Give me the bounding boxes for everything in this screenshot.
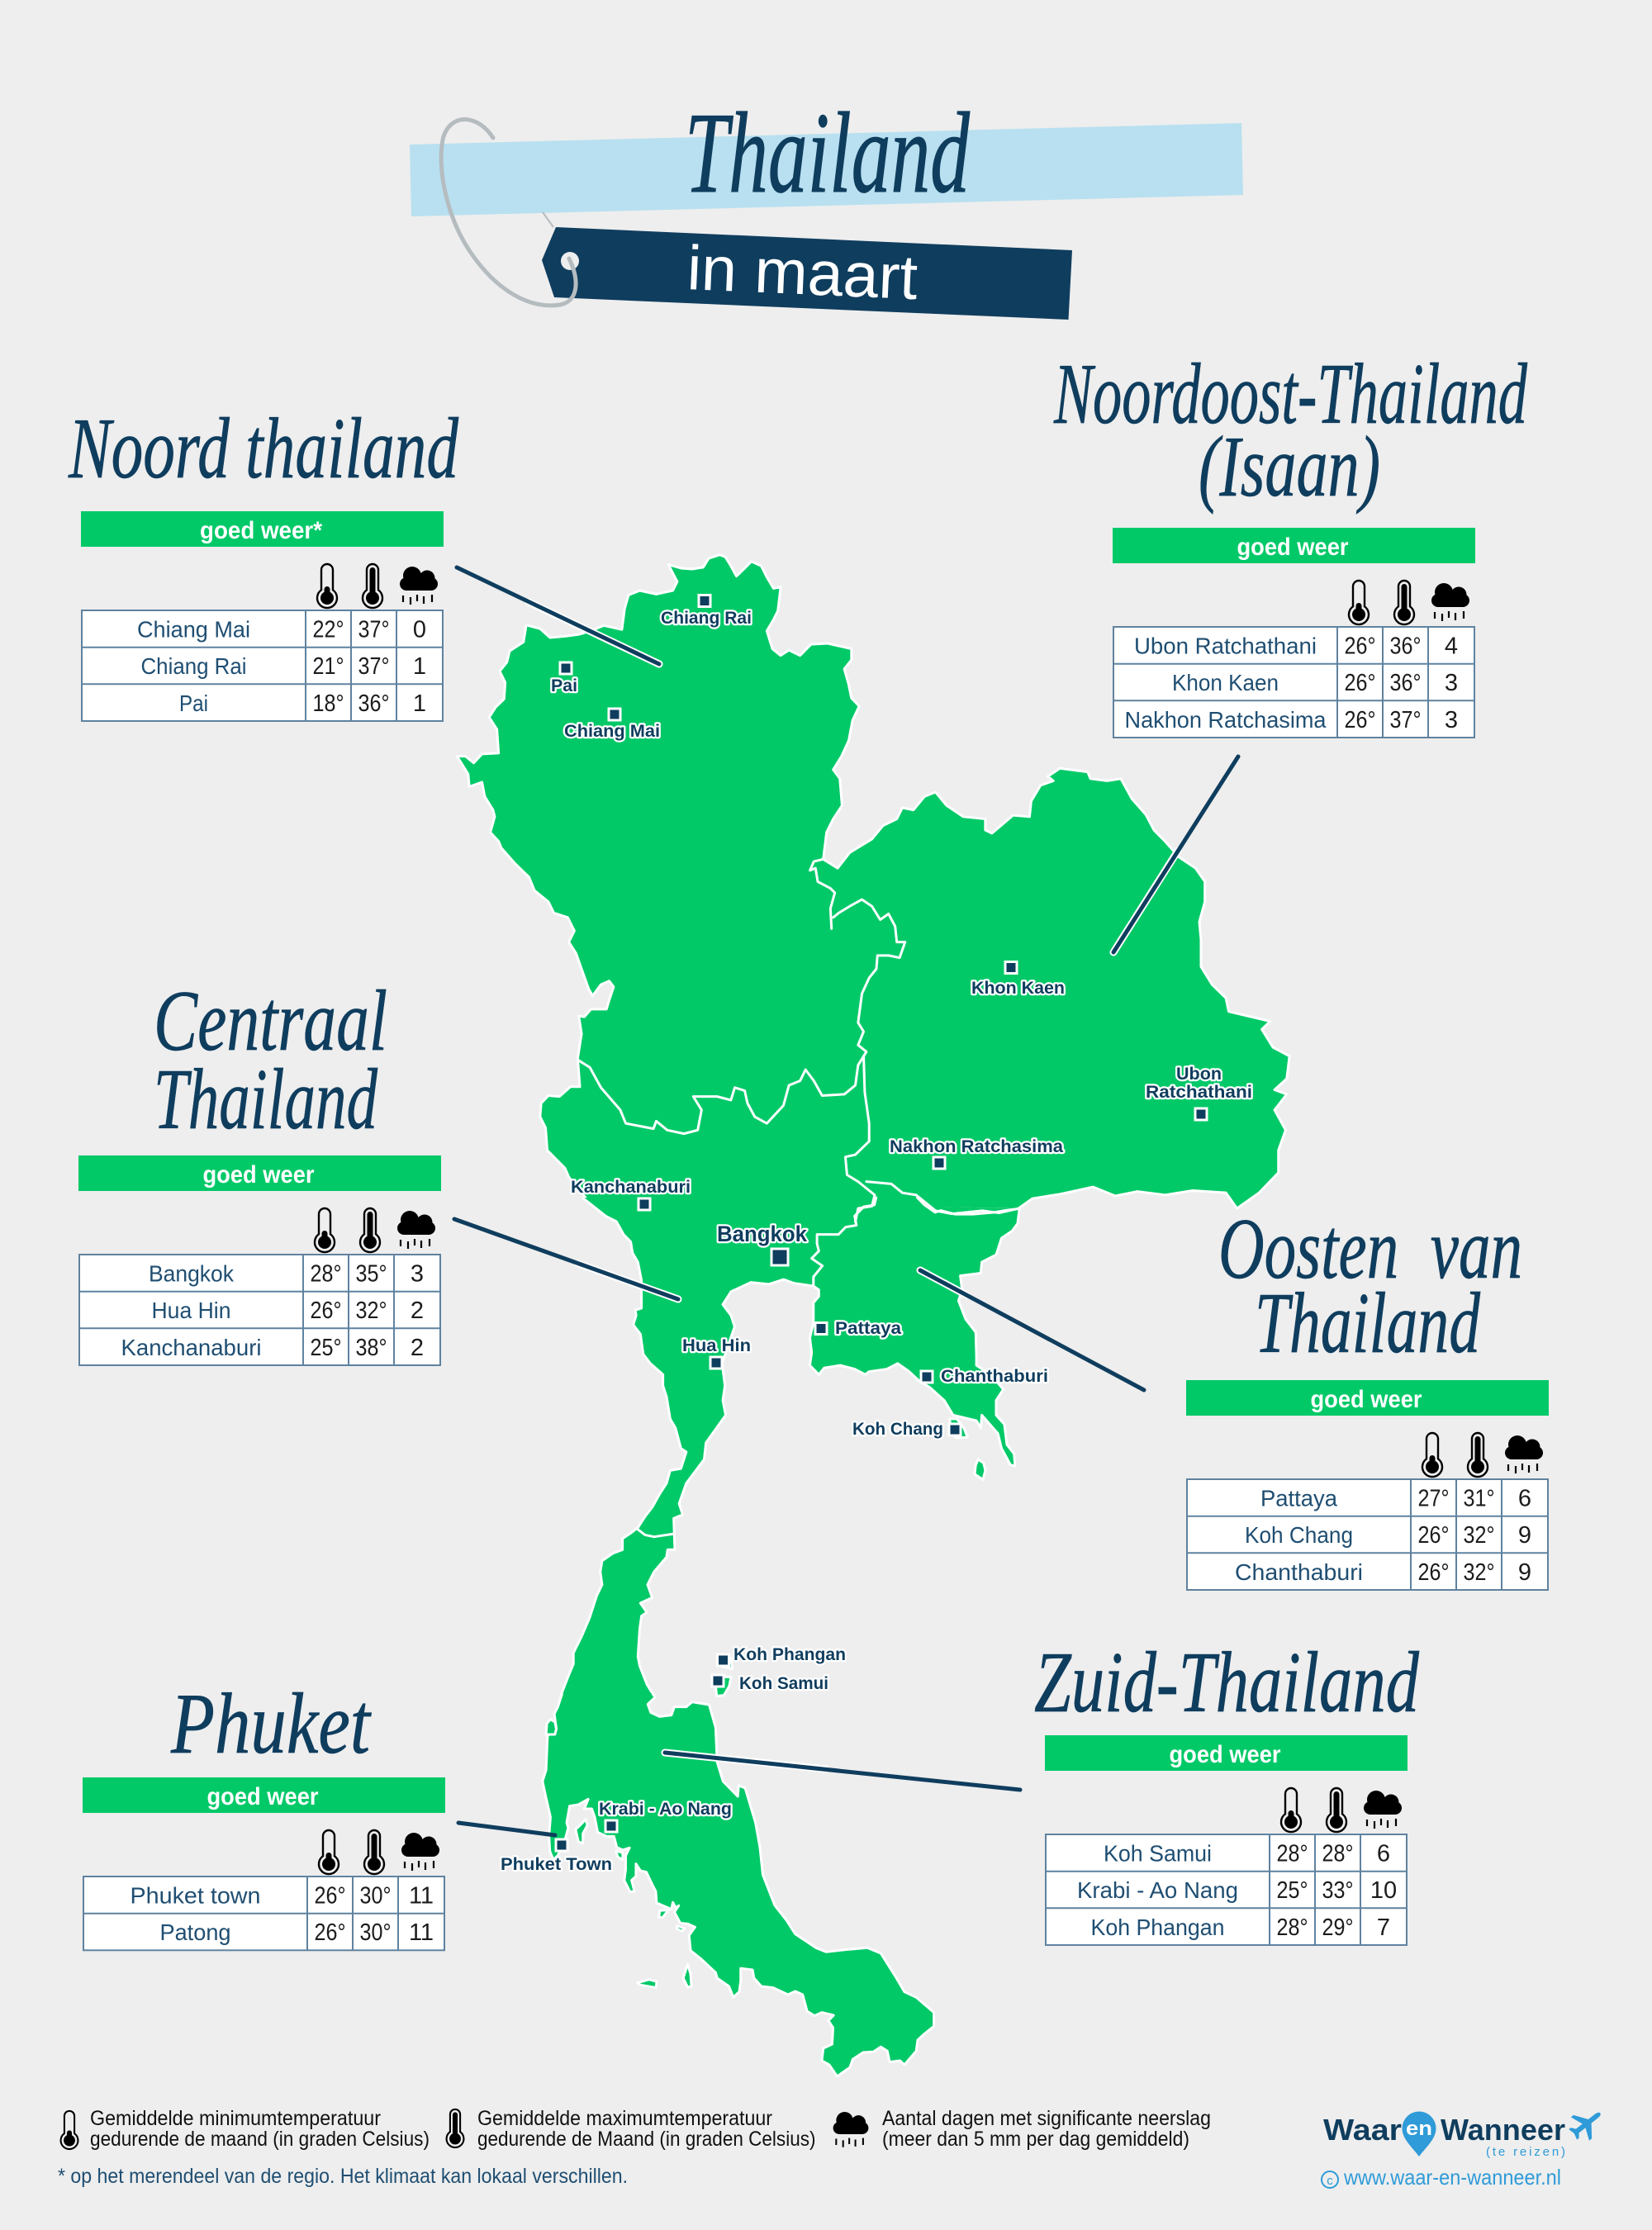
weather bar — [1045, 1735, 1408, 1771]
tag hole — [561, 252, 579, 270]
heading — [154, 972, 387, 1147]
table: 28° — [311, 1260, 342, 1287]
logo — [1322, 2101, 1609, 2190]
icon: rain cloud — [401, 1833, 439, 1871]
table: 2 — [411, 1335, 424, 1361]
table: 29° — [1322, 1914, 1353, 1941]
table: Koh Phangan — [1090, 1914, 1224, 1940]
icon: max temperature — [1394, 581, 1414, 624]
icon: max temperature — [364, 1830, 384, 1874]
pointer: phuket — [458, 1823, 555, 1835]
table: 38° — [355, 1335, 387, 1361]
table: Hua Hin — [152, 1298, 231, 1323]
legend — [61, 2107, 1211, 2151]
legend: precipitation: (meer dan 5 mm per dag gemiddeld) — [882, 2128, 1189, 2151]
table: 36° — [1389, 670, 1421, 696]
icon: min temperature — [319, 1830, 339, 1874]
table: 1 — [413, 653, 426, 680]
table: Chanthaburi — [1235, 1559, 1363, 1585]
icon: min temperature — [315, 1208, 335, 1252]
map: Koh Kut island — [975, 1459, 985, 1479]
weather bar — [1113, 528, 1475, 563]
table: 30° — [360, 1919, 392, 1946]
table — [83, 1877, 444, 1950]
subtitle text: in maart — [686, 233, 919, 313]
title text: Thailand — [685, 89, 971, 217]
icon: max temperature — [1468, 1433, 1488, 1477]
table: 25° — [1277, 1877, 1308, 1904]
city: Pai: Pai — [551, 676, 577, 695]
map: central, east and upper south land — [561, 1198, 1019, 1696]
table — [1113, 627, 1474, 738]
city: Nakhon Ratchasima — [890, 1137, 1063, 1169]
table: Khon Kaen — [1172, 670, 1279, 695]
table: 26° — [314, 1883, 345, 1910]
table: Kanchanaburi — [121, 1335, 261, 1360]
table: Ubon Ratchathani — [1134, 633, 1317, 659]
table: 26° — [314, 1919, 345, 1946]
heading: (Isaan) — [1199, 418, 1380, 515]
legend: max temperature: gedurende de Maand (in graden Celsius) — [477, 2128, 816, 2151]
logo: Wanneer: Wanneer — [1441, 2113, 1565, 2147]
weather bar — [81, 511, 444, 547]
map: border central-east — [812, 1198, 876, 1286]
weather bar: goed weer — [1237, 534, 1349, 561]
city: Pai — [551, 662, 577, 695]
city: Ubon Ratchathani: Ubon — [1176, 1065, 1222, 1084]
icon: rain cloud — [400, 567, 438, 605]
pointer: south — [665, 1753, 1020, 1790]
table: 3 — [1445, 670, 1458, 696]
table: 10 — [1370, 1877, 1397, 1904]
table: 3 — [1445, 707, 1458, 733]
city: Pattaya: Pattaya — [835, 1319, 901, 1338]
pointer: northeast — [1113, 757, 1238, 952]
logo: Waar: Waar — [1323, 2113, 1402, 2147]
icon: max temperature — [1327, 1788, 1346, 1832]
weather bar — [78, 1155, 441, 1191]
heading: Thailand — [154, 1051, 377, 1147]
city: Krabi - Ao Nang: Krabi - Ao Nang — [599, 1800, 732, 1819]
table: Patong — [160, 1919, 231, 1945]
map: Koh Yao island — [576, 1820, 587, 1843]
icon: max temperature — [363, 564, 382, 608]
city: Hua Hin — [682, 1336, 751, 1369]
table: 4 — [1445, 633, 1458, 659]
table: 11 — [409, 1883, 434, 1910]
table: Bangkok — [149, 1260, 235, 1287]
table: Pai — [179, 690, 208, 716]
legend: min temperature — [61, 2107, 430, 2151]
table: Pattaya — [1260, 1485, 1337, 1511]
table: 26° — [1417, 1559, 1449, 1586]
heading — [1053, 345, 1527, 515]
map: border central-northeast — [845, 1056, 875, 1222]
city: Koh Phangan: Koh Phangan — [733, 1645, 846, 1664]
table: 35° — [355, 1260, 387, 1287]
table: Koh Chang — [1245, 1522, 1353, 1548]
weather bar: goed weer* — [200, 517, 322, 544]
panel: Centraal Thailand — [78, 972, 441, 1365]
panel: Zuid-Thailand — [1034, 1634, 1419, 1945]
logo: te reizen: (te reizen) — [1486, 2145, 1565, 2159]
pointer: central — [454, 1219, 678, 1299]
table: Koh Samui — [1104, 1840, 1212, 1867]
icon: min temperature — [317, 564, 337, 608]
city: Koh Chang: Koh Chang — [852, 1420, 943, 1439]
city: Chanthaburi: Chanthaburi — [941, 1367, 1048, 1386]
city: Nakhon Ratchasima: Nakhon Ratchasima — [890, 1137, 1063, 1156]
logo: en: en — [1406, 2118, 1432, 2140]
legend: precipitation: Aantal dagen met significante neerslag — [882, 2107, 1211, 2130]
city: Koh Samui: Koh Samui — [739, 1674, 828, 1693]
map: Koh Samui island — [715, 1677, 731, 1696]
map: border east-northeast — [866, 1182, 1018, 1214]
city: Kanchanaburi — [571, 1178, 691, 1210]
heading: Zuid-Thailand — [1034, 1634, 1419, 1730]
icon: max temperature — [360, 1208, 380, 1252]
map: small island A — [659, 1910, 668, 1918]
string loop — [441, 120, 576, 306]
table: 6 — [1377, 1840, 1390, 1867]
panel: Oosten van Thailand — [1186, 1200, 1549, 1590]
heading: Centraal — [154, 972, 387, 1069]
table — [1187, 1479, 1548, 1590]
city: Chiang Rai: Chiang Rai — [661, 609, 752, 628]
table: 37° — [1389, 707, 1421, 733]
table: 0 — [413, 616, 426, 643]
table: 25° — [311, 1335, 342, 1361]
table: 31° — [1464, 1485, 1495, 1511]
table: 3 — [411, 1260, 424, 1287]
table: 36° — [1389, 633, 1421, 659]
table: 37° — [358, 653, 390, 680]
legend: max temperature — [447, 2107, 816, 2151]
table: 26° — [1345, 670, 1376, 696]
heading — [1218, 1200, 1522, 1371]
map: Koh Lanta island — [616, 1851, 623, 1860]
map: Koh Phangan island — [722, 1658, 732, 1668]
map: Tarutao island — [683, 1964, 691, 1987]
table: 36° — [358, 690, 390, 717]
table: 26° — [1345, 633, 1376, 659]
table: 37° — [358, 616, 390, 643]
table: 2 — [411, 1298, 424, 1324]
map: Koh Chang island — [950, 1419, 967, 1438]
legend: max temperature: Gemiddelde maximumtemperatuur — [477, 2107, 772, 2130]
city: Chiang Mai: Chiang Mai — [564, 722, 660, 741]
table: 33° — [1322, 1877, 1353, 1904]
map: north and northeast land — [457, 555, 1289, 1208]
table: 9 — [1518, 1522, 1531, 1549]
logo: pin — [1403, 2111, 1436, 2156]
city: Krabi - Ao Nang — [599, 1800, 732, 1832]
city: Khon Kaen: Khon Kaen — [971, 979, 1065, 998]
table: 32° — [1464, 1522, 1495, 1549]
map: small island north — [546, 1720, 557, 1734]
icon: rain cloud — [1364, 1791, 1402, 1829]
map of Thailand — [457, 555, 1289, 2076]
heading: Thailand — [1255, 1274, 1480, 1371]
icon: rain cloud — [1431, 583, 1469, 621]
table — [79, 1255, 440, 1365]
panel: Noord Thailand — [68, 400, 458, 721]
map: border northeast-east — [918, 1198, 1019, 1214]
thread segment — [543, 212, 553, 227]
city: Hua Hin: Hua Hin — [682, 1336, 751, 1355]
icon: rain cloud — [397, 1211, 435, 1249]
panel: Phuket — [83, 1675, 445, 1950]
table: 32° — [1464, 1559, 1495, 1586]
table: 26° — [1345, 707, 1376, 733]
table: 28° — [1277, 1840, 1308, 1867]
map: small island B — [676, 1926, 685, 1931]
legend: min temperature: Gemiddelde minimumtemperatuur — [90, 2107, 381, 2130]
panel: Noordoost-Thailand — [1053, 345, 1527, 738]
logo: copyright url: www.waar-en-wanneer.nl — [1343, 2165, 1561, 2190]
weather bar: goed weer — [206, 1783, 319, 1810]
icon: min temperature — [1422, 1433, 1442, 1477]
city: Phuket Town — [501, 1839, 612, 1874]
city: Bangkok: Bangkok — [717, 1222, 808, 1246]
heading: Phuket — [170, 1675, 372, 1772]
city labels — [501, 595, 1252, 1874]
title band — [410, 123, 1243, 216]
table: 28° — [1322, 1840, 1353, 1867]
table: 21° — [312, 653, 344, 680]
table — [82, 610, 443, 721]
city: Bangkok — [717, 1222, 808, 1265]
icon: min temperature — [1349, 581, 1369, 624]
footnote: * op het merendeel van de regio. Het klimaat kan lokaal verschillen. — [58, 2165, 628, 2188]
city: Chiang Mai — [564, 709, 660, 741]
city: Ubon Ratchathani — [1146, 1065, 1252, 1120]
legend: precipitation — [833, 2107, 1211, 2151]
weather bar: goed weer — [1170, 1741, 1281, 1768]
table: 9 — [1518, 1559, 1531, 1586]
heading: Noord thailand — [68, 400, 458, 496]
table: Chiang Rai — [140, 653, 246, 679]
map: border central-south — [638, 1530, 674, 1537]
logo: copyright url: c — [1327, 2174, 1333, 2188]
city: Khon Kaen — [971, 961, 1065, 998]
city: Phuket Town: Phuket Town — [501, 1855, 612, 1874]
city: Ubon Ratchathani: Ratchathani — [1146, 1083, 1252, 1102]
map: south land — [543, 1693, 934, 2076]
map: border north-northeast — [577, 859, 905, 1134]
table: 11 — [409, 1919, 434, 1946]
table: Krabi - Ao Nang — [1077, 1877, 1238, 1903]
weather bar: goed weer — [1310, 1386, 1422, 1413]
table: 6 — [1518, 1485, 1531, 1511]
table: 28° — [1277, 1914, 1308, 1941]
pointer: east — [920, 1270, 1144, 1390]
weather bar — [1186, 1380, 1549, 1416]
table: 22° — [312, 616, 344, 643]
table: 27° — [1417, 1485, 1449, 1511]
table: 1 — [413, 690, 426, 717]
table — [1046, 1834, 1407, 1945]
heading: Oosten van — [1218, 1200, 1522, 1297]
icon: min temperature — [1281, 1788, 1301, 1832]
table: Phuket town — [131, 1883, 261, 1908]
table: 26° — [1417, 1522, 1449, 1549]
icon: rain cloud — [1505, 1435, 1543, 1473]
legend: min temperature: gedurende de maand (in graden Celsius) — [90, 2128, 430, 2151]
city: Chiang Rai — [661, 595, 752, 628]
city: Kanchanaburi: Kanchanaburi — [571, 1178, 691, 1197]
pointer: north — [457, 567, 659, 664]
table: 32° — [355, 1298, 387, 1324]
weather bar: goed weer — [203, 1161, 315, 1189]
table: Chiang Mai — [137, 616, 250, 643]
subtitle tag — [542, 227, 1072, 320]
table: 30° — [360, 1883, 392, 1910]
table: Nakhon Ratchasima — [1125, 707, 1327, 733]
logo: plane — [1564, 2101, 1609, 2146]
table: 26° — [311, 1298, 342, 1324]
map: Adang island — [638, 1980, 657, 1988]
title block — [410, 89, 1243, 320]
weather bar — [83, 1777, 445, 1813]
map: inner region borders — [577, 859, 1018, 1222]
table: 7 — [1377, 1914, 1390, 1941]
table: 18° — [312, 690, 344, 717]
